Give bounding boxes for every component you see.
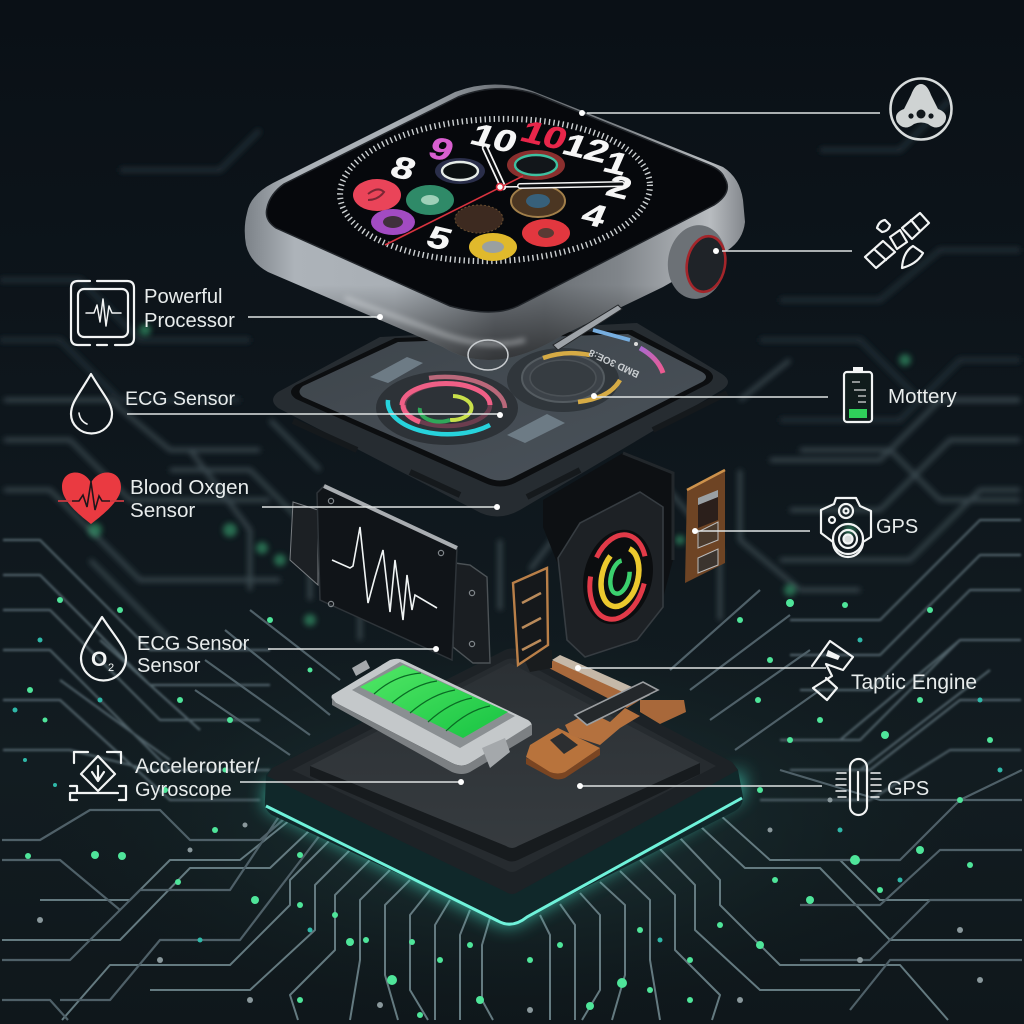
label: taptic engine [812, 641, 977, 700]
label: powerful processor: Powerful [144, 286, 223, 308]
side button [553, 305, 622, 350]
display plate [273, 323, 728, 516]
watch face: 10 [466, 117, 523, 159]
watch face: 4 [576, 196, 612, 234]
icon: drop [71, 374, 112, 433]
watch face: 8 [385, 149, 421, 187]
label: accelerometer: Gyroscope [135, 779, 232, 801]
label: powerful processor [71, 281, 235, 345]
icon: speaker [821, 498, 871, 557]
label: battery: Mottery [888, 385, 957, 408]
label: blood oxygen sensor [58, 473, 249, 524]
label: battery [844, 367, 957, 422]
icon: capsule [836, 759, 881, 815]
screen [266, 89, 727, 312]
watch face: 2 [601, 168, 637, 206]
icon: battery [844, 367, 872, 422]
icon: heart [58, 473, 124, 524]
label: accelerometer: Acceleronter/ [135, 755, 260, 778]
ECG module [290, 485, 490, 663]
copper flex connector [513, 568, 686, 780]
label: powerful processor: Processor [144, 310, 235, 332]
label: accelerometer [70, 752, 260, 801]
icon: O2 drop: 2 [108, 662, 114, 674]
watch face: 9 [423, 130, 459, 168]
watch face: 10 [516, 114, 573, 156]
chip glow [265, 770, 743, 925]
crown [663, 221, 731, 303]
glowing dots [12, 324, 1002, 1018]
label: O2 ECG sensor [81, 617, 250, 680]
icon: processor [71, 281, 134, 345]
watch face: 12 [558, 127, 615, 169]
display plate: BMD 3OE:8 [587, 346, 641, 379]
icon: top right circular glyph [890, 78, 952, 140]
icon: satellite [865, 213, 929, 268]
label: O2 ECG sensor: Sensor [137, 655, 201, 677]
label: GPS lower [836, 759, 929, 815]
icon: gyroscope [70, 752, 126, 800]
label: GPS [821, 498, 918, 557]
label: GPS: GPS [876, 516, 918, 538]
round haptic module [543, 453, 725, 657]
watch face: 5 [421, 219, 457, 257]
battery [332, 659, 532, 774]
leader lines [127, 110, 880, 789]
label: GPS lower: GPS [887, 778, 929, 800]
watch face [338, 114, 652, 266]
label: taptic engine: Taptic Engine [851, 671, 977, 694]
icon: O2 drop [81, 617, 126, 680]
watch body [245, 84, 745, 370]
chip: processor base [265, 648, 743, 925]
label: blood oxygen sensor: Sensor [130, 499, 195, 522]
label: ECG sensor: ECG Sensor [125, 388, 235, 410]
icon: taptic [812, 641, 853, 700]
label: ECG sensor [71, 374, 235, 433]
watch face: 1 [598, 144, 634, 182]
label: blood oxygen sensor: Blood Oxgen [130, 476, 249, 499]
label: O2 ECG sensor: ECG Sensor [137, 633, 250, 655]
icon: O2 drop: O [91, 648, 107, 671]
